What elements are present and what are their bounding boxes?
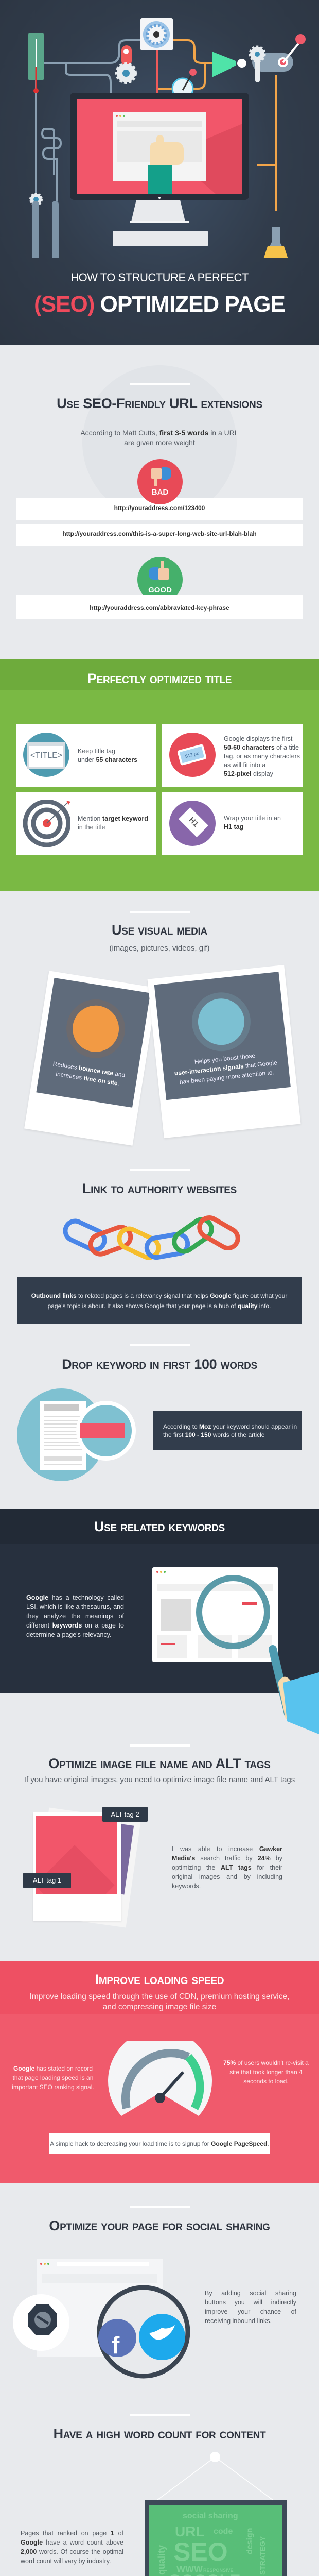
card: target keyword: Mention target keyword: [78, 815, 148, 822]
URL box bad: [16, 498, 303, 546]
panel: SEO-friendly URLs: [0, 345, 319, 659]
intro text: According to Matt Cutts, first 3-5 words in a URL: [80, 429, 239, 437]
card: target keyword: [16, 792, 156, 855]
heading: Optimize your page for social sharing: [49, 2218, 270, 2233]
illustration: browser with magnifier: [152, 1567, 319, 1734]
icon: good thumbs up: [137, 557, 183, 602]
card: 512 px: 512-pixel display: [224, 770, 273, 777]
card: H1 tag: [162, 792, 303, 855]
card: 512 px: 50-60 characters of a title: [224, 744, 299, 751]
hero section: [0, 0, 319, 345]
polaroid: bounce rate: [24, 971, 157, 1146]
icon: word cloud frame: quality: [156, 2545, 167, 2575]
callout: outbound links: Outbound links to related pages is a relevancy signal that helps Google figure out what your page's topic is about. It also shows Google that your page is a hub of quality info.: [31, 1292, 287, 1310]
icon: title window: <TITLE>: [30, 751, 62, 760]
hero section: (SEO) OPTIMIZED PAGE: [34, 292, 285, 317]
icon: bad thumbs down: BAD: [152, 488, 168, 497]
panel: improve loading speed: Improve loading speed through the use of CDN, premium hosting service,: [30, 1992, 289, 2001]
icon: word cloud frame: STRATEGY: [258, 2536, 267, 2575]
illustration: browser with social icons: f: [112, 2332, 120, 2359]
card: title tag: under 55 characters: [78, 756, 137, 764]
gauge: [172, 78, 193, 99]
intro text: are given more weight: [124, 438, 195, 447]
test tubes: [32, 201, 39, 286]
label: ALT tag 1: [23, 1873, 71, 1888]
gear & red pill: [121, 45, 132, 66]
callout: PageSpeed: [49, 2133, 270, 2154]
callout: Moz: According to Moz your keyword should appear in the first 100 - 150 words of the article: [163, 1423, 297, 1438]
card: 512 px: Google displays the first: [224, 735, 292, 742]
card: target keyword: in the title: [78, 824, 105, 831]
text block: Gawker: I was able to increase Gawker Media's search traffic by 24% by optimizing the ALT tags for their original images and by including keywords.: [172, 1845, 282, 1890]
card: title tag: [16, 724, 156, 787]
panel: link to authority: [0, 1159, 319, 1509]
icon: word cloud frame: RESPONSIVE: [203, 2568, 234, 2573]
polaroid: user interaction: [148, 965, 300, 1138]
polaroid: bounce rate: increases time on site.: [56, 1070, 120, 1087]
panel: social sharing: By adding social sharing buttons you will indirectly improve your chance of receiving inbound links.: [205, 2290, 296, 2325]
icon: H1 label: [169, 801, 216, 846]
label: ALT tag 1: ALT tag 1: [33, 1876, 61, 1884]
heading: Have a high word count for content: [54, 2426, 265, 2442]
icon: target: [23, 800, 70, 847]
icon: word cloud frame: social sharing: [183, 2512, 238, 2520]
panel: image file name & ALT tags: [0, 1693, 319, 1961]
lever: [252, 53, 293, 72]
polaroid: user interaction: Helps you boost those: [194, 1052, 256, 1065]
icon: bad thumbs down: [137, 459, 183, 504]
panel: use visual media: (images, pictures, videos, gif): [109, 944, 210, 953]
callout: outbound links: [17, 1277, 302, 1324]
label: ALT tag 2: ALT tag 2: [111, 1810, 139, 1818]
text: Google statement: Google has stated on record that page loading speed is an important SEO ranking signal.: [12, 2065, 94, 2091]
URL box bad: http://youraddress.com/this-is-a-super-long-web-site-url-blah-blah: [62, 530, 257, 537]
hero title: HOW TO STRUCTURE A PERFECT: [70, 271, 249, 284]
icon: phone in hand: 512 px: [185, 751, 199, 759]
icon: word cloud frame: code: [214, 2527, 233, 2536]
hero illustration: [28, 18, 306, 258]
card: H1 tag: Wrap your title in an: [224, 815, 281, 822]
callout: Moz: [153, 1411, 302, 1450]
panel: perfectly optimized title: [0, 659, 319, 891]
gear small left: [30, 194, 42, 205]
heading: Use related keywords: [94, 1519, 225, 1534]
text block: LSI: Google has a technology called LSI, which is like a thesaurus, and they analyze the meanings of different keywords on a page to determine a page's relevancy.: [26, 1594, 124, 1638]
heading: Use visual media: [112, 922, 207, 938]
heading: Use SEO-Friendly URL extensions: [57, 396, 262, 411]
heading: Drop keyword in first 100 words: [62, 1357, 257, 1372]
icon: word cloud frame: [145, 2452, 287, 2576]
panel: social sharing: [0, 2183, 319, 2576]
gauge: [108, 2041, 212, 2116]
polaroid: user interaction: has been paying more attention to.: [179, 1069, 274, 1086]
thermometer: [28, 33, 44, 80]
URL box bad: http://youraddress.com/123400: [114, 504, 205, 512]
card: 512 px: [162, 724, 303, 787]
heading: Perfectly optimized title: [87, 671, 232, 686]
callout: PageSpeed: A simple hack to decreasing your load time is to signup for Google PageSpeed.: [50, 2140, 269, 2147]
icon: good thumbs up: GOOD: [148, 586, 172, 595]
fan: [140, 18, 173, 50]
illustration: photos with ALT tags: [23, 1807, 148, 1928]
panel: improve loading speed: and compressing image file size: [103, 2003, 216, 2011]
text: 75% users: 75% of users wouldn't re-visit a site that took longer than 4 seconds to load.: [223, 2059, 309, 2085]
card: 512 px: as will fit into a: [224, 761, 265, 769]
polaroid: bounce rate: Reduces bounce rate and: [52, 1060, 126, 1079]
icon: word cloud frame: design: [245, 2528, 254, 2554]
horn: [212, 52, 236, 77]
panel: use visual media: [0, 891, 319, 1159]
URL box good: http://youraddress.com/abbraviated-key-phrase: [90, 604, 229, 612]
intro text: [80, 429, 239, 447]
panel: improve loading speed: [0, 1961, 319, 2183]
card: 512 px: tag, or as many characters: [224, 753, 300, 760]
icon: document with magnifier: [17, 1388, 136, 1481]
heading: Link to authority websites: [82, 1181, 237, 1196]
icon: H1 label: H1: [187, 816, 200, 828]
icon: chain: [63, 1215, 240, 1260]
panel: related keywords: [0, 1509, 319, 1693]
URL box good: [16, 595, 303, 619]
card: title tag: Keep title tag: [78, 748, 115, 755]
illustration: browser with social icons: [13, 2259, 190, 2378]
icon: title window: [23, 733, 69, 777]
heading: Optimize image file name and ALT tags: [48, 1756, 271, 1771]
polaroid: user interaction: user-interaction signals that Google: [174, 1059, 277, 1077]
monitor: [70, 93, 249, 200]
icon: word cloud frame: URL: [175, 2523, 205, 2539]
card: H1 tag: H1 tag: [224, 823, 243, 831]
label: ALT tag 2: [102, 1807, 148, 1822]
text: If you have original images, you need to optimize image file name and ALT tags: [24, 1775, 295, 1784]
icon: word cloud frame: SEO: [173, 2537, 228, 2566]
text: word count: Pages that ranked on page 1 of Google have a word count above 2,000 words. Of course the optimal word count will vary by industry.: [21, 2530, 123, 2565]
icon: word cloud frame: WWW: [176, 2564, 203, 2574]
heading: Improve loading speed: [95, 1972, 224, 1987]
flask: [260, 227, 292, 265]
icon: phone in hand: [169, 733, 216, 777]
